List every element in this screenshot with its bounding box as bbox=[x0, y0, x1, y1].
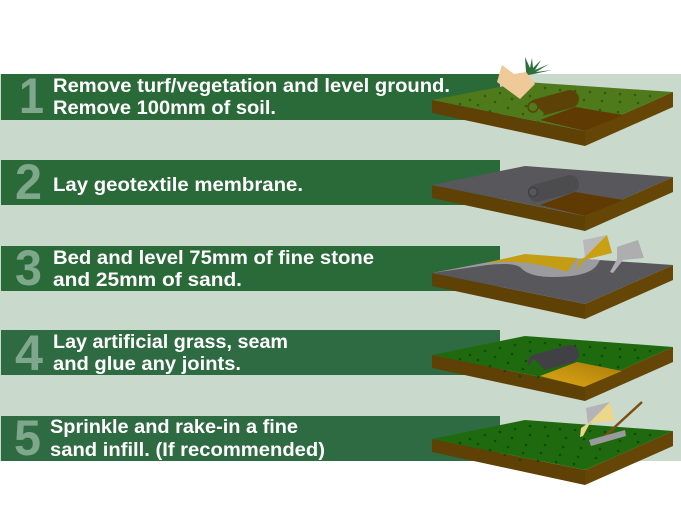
step 4 text bbox=[53, 332, 288, 375]
icon: hand bbox=[497, 65, 535, 99]
icon: rake bbox=[589, 402, 642, 446]
step 5 text: sand infill. (If recommended) bbox=[50, 440, 325, 461]
icon: sand bag bbox=[577, 235, 612, 270]
step 1 banner bbox=[1, 68, 500, 124]
illustration: stone and sand bbox=[432, 235, 673, 319]
step 2 number: 2 bbox=[15, 154, 42, 210]
step 3 text: and 25mm of sand. bbox=[53, 270, 242, 291]
illustration: removing turf bbox=[432, 57, 673, 146]
step 1 text: Remove turf/vegetation and level ground. bbox=[53, 76, 450, 97]
icon: stone bag bbox=[610, 240, 644, 273]
illustration: membrane bbox=[432, 166, 673, 231]
step 5 text: Sprinkle and rake-in a fine bbox=[50, 417, 298, 438]
step 4 banner bbox=[1, 325, 500, 381]
step 4 text: and glue any joints. bbox=[53, 354, 241, 375]
step 5 text bbox=[50, 417, 325, 461]
step 1 text bbox=[53, 76, 450, 119]
step 4 number: 4 bbox=[15, 325, 43, 381]
illustration: laying artificial grass bbox=[432, 336, 673, 401]
step 3 number: 3 bbox=[15, 240, 42, 296]
step 2 banner bbox=[1, 154, 500, 210]
step 2 text: Lay geotextile membrane. bbox=[53, 175, 303, 196]
background panel bbox=[0, 74, 681, 461]
icon: grass tuft bbox=[525, 57, 552, 75]
step 3 text bbox=[53, 248, 374, 291]
step 5 banner bbox=[1, 410, 500, 466]
step 1 number: 1 bbox=[19, 68, 44, 124]
step 1 text: Remove 100mm of soil. bbox=[53, 98, 276, 119]
step 3 text: Bed and level 75mm of fine stone bbox=[53, 248, 374, 269]
illustration: sand infill and rake bbox=[432, 402, 673, 485]
step 5 number: 5 bbox=[14, 410, 41, 466]
step 3 banner bbox=[1, 240, 500, 296]
step 4 text: Lay artificial grass, seam bbox=[53, 332, 288, 353]
icon: sand bag with spout bbox=[580, 402, 615, 437]
